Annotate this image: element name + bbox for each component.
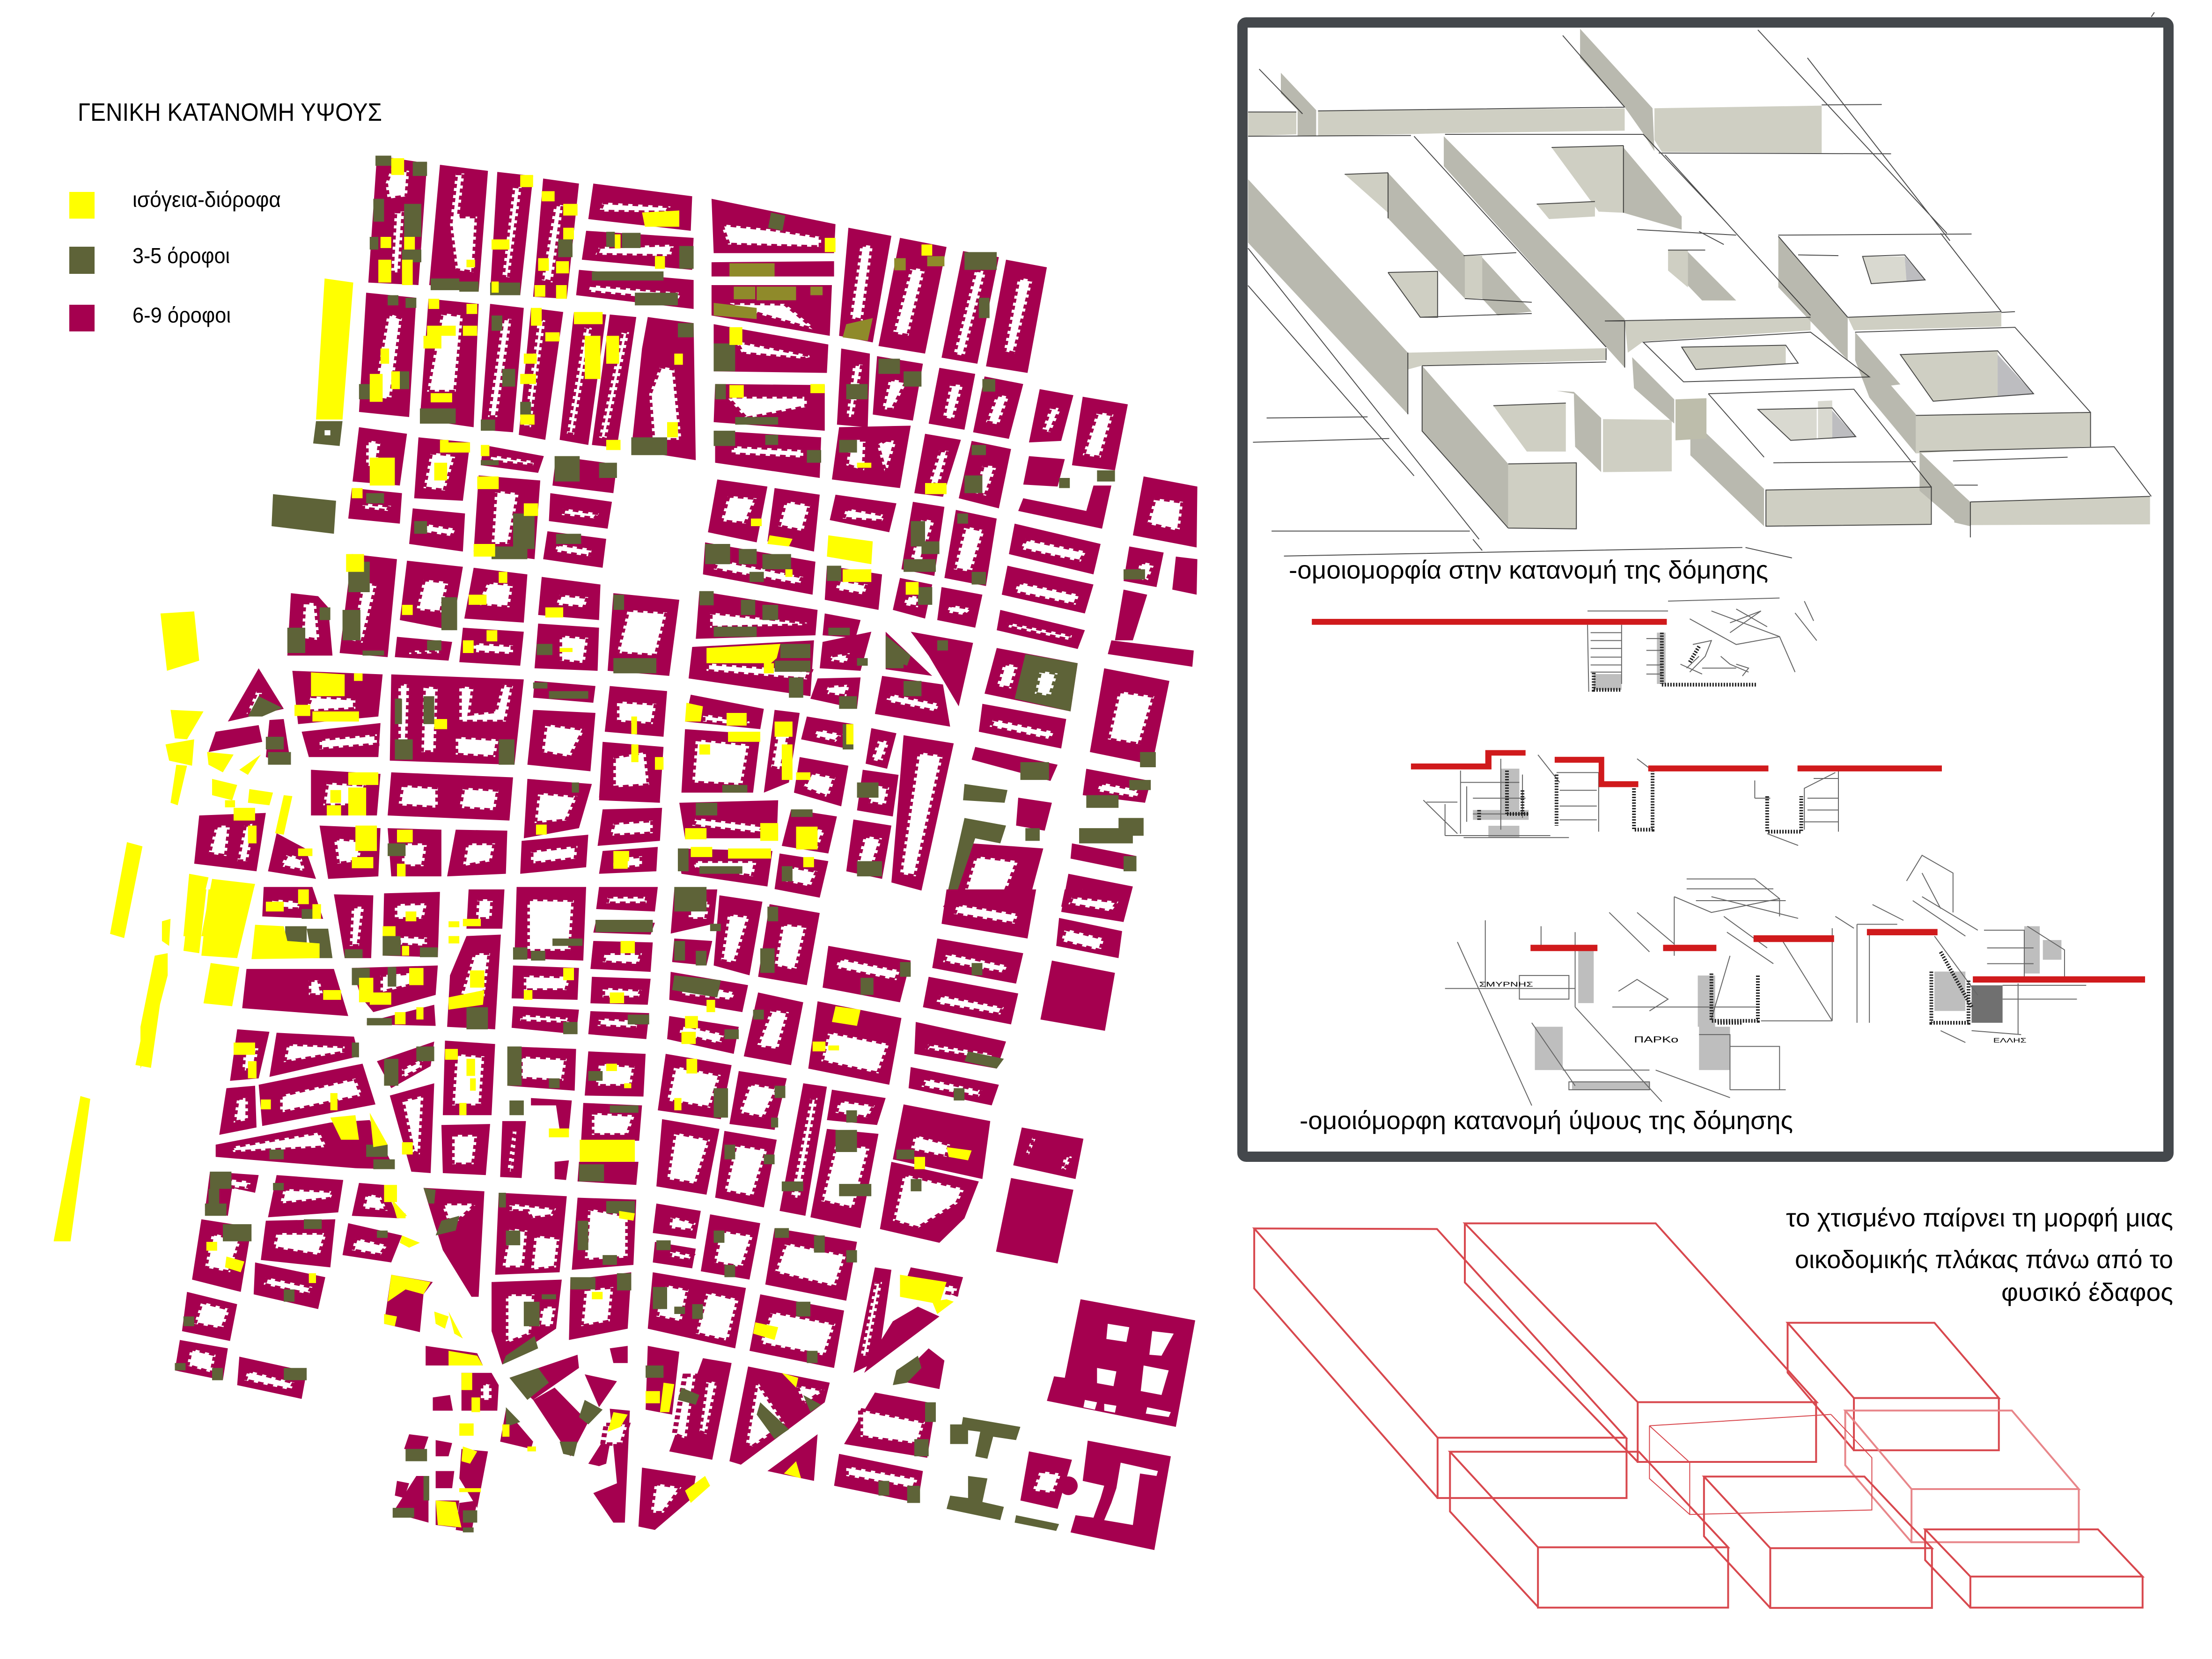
hand label: Smyrnis street: ΣΜΥΡΝΗΣ	[1479, 981, 1533, 988]
blocks of ground to two floors, north	[161, 158, 947, 936]
caption: uniform height distribution: -ομοιόμορφη κατανομή ύψους της δόμησης	[1300, 1107, 1793, 1135]
description line one: το χτισμένο παίρνει τη μορφή μιας	[1786, 1204, 2173, 1232]
section sketch two	[1411, 750, 1942, 845]
legend item: ground to two floors	[69, 187, 281, 219]
section sketch three	[1445, 855, 2145, 1106]
clean openings in large buildings	[1083, 1324, 1174, 1525]
dark inner court faces	[1832, 257, 2034, 439]
description line three: φυσικό έδαφος	[2001, 1278, 2173, 1307]
small pen mark at frame corner	[2151, 12, 2154, 17]
tan recess face	[1676, 398, 1706, 440]
older low-rise blocks in ochre	[713, 256, 944, 341]
far-left low-rise yellow strips	[54, 842, 167, 1241]
olive square block with small court	[313, 421, 343, 446]
blocks of six to nine floors, north	[194, 156, 1198, 922]
frame border	[1242, 22, 2168, 1157]
wireframe box seven	[1925, 1529, 2143, 1608]
height line, broken	[1530, 929, 2145, 983]
legend item: three to five floors: 3-5 όροφοι	[132, 243, 230, 268]
hand label: Ellis street: ΕΛΛΗΣ	[1993, 1037, 2027, 1044]
wireframe box two	[1465, 1223, 1817, 1462]
red wireframe volumes	[1254, 1223, 2143, 1608]
wireframe box eight, thin	[1649, 1415, 1872, 1514]
description line two: οικοδομικής πλάκας πάνω από το	[1795, 1246, 2173, 1274]
section sketch one	[1312, 598, 1817, 692]
mid-tone faces of the volumes	[1248, 106, 2150, 529]
isometric massing sketch	[1248, 12, 2154, 558]
map: building height distribution	[54, 156, 1198, 1550]
legend item: ground to two floors: ισόγεια-διόροφα	[132, 187, 281, 212]
blocks of three to five floors, north	[248, 156, 1156, 902]
height line, stepped	[1411, 750, 1942, 787]
wireframe box six	[1704, 1476, 1932, 1608]
wireframe box one	[1254, 1228, 1626, 1498]
map: northern blocks	[161, 156, 1198, 936]
light inner court faces	[1758, 257, 1907, 440]
blocks of ground to two floors, south	[140, 889, 971, 1527]
title: ΓΕΝΙΚΗ ΚΑΤΑΝΟΜΗ ΥΨΟΥΣ	[78, 98, 382, 126]
wireframe box three	[1450, 1452, 1728, 1608]
blocks of three to five floors, south	[175, 887, 1059, 1533]
blocks of six to nine floors, south	[175, 887, 1195, 1550]
apse of the round-ended building	[1059, 1476, 1078, 1495]
legend item: six to nine floors	[69, 303, 231, 331]
street section sketches with red height lines	[1312, 598, 2145, 1106]
wireframe box five, faded	[1845, 1410, 2079, 1542]
legend item: six to nine floors: 6-9 όροφοι	[132, 303, 231, 327]
courtyards, north	[208, 169, 1183, 910]
caption: uniformity in building distribution: -ομοιομορφία στην κατανομή της δόμησης	[1289, 556, 1768, 584]
sketch pen lines	[1248, 30, 2151, 558]
courtyards, south	[187, 897, 1118, 1513]
panel: uniform massing and height sketches	[1242, 12, 2173, 1608]
courtyard in the olive block	[1035, 671, 1058, 696]
height line, level	[1312, 619, 1667, 625]
wireframe box four	[1787, 1323, 1999, 1450]
hand label: park: ΠΑΡΚο	[1634, 1035, 1678, 1045]
description text	[1786, 1204, 2173, 1307]
legend item: three to five floors	[69, 243, 230, 274]
map: southern blocks	[140, 887, 1195, 1550]
legend	[69, 187, 281, 331]
shaded faces of the volumes	[1248, 29, 1970, 528]
